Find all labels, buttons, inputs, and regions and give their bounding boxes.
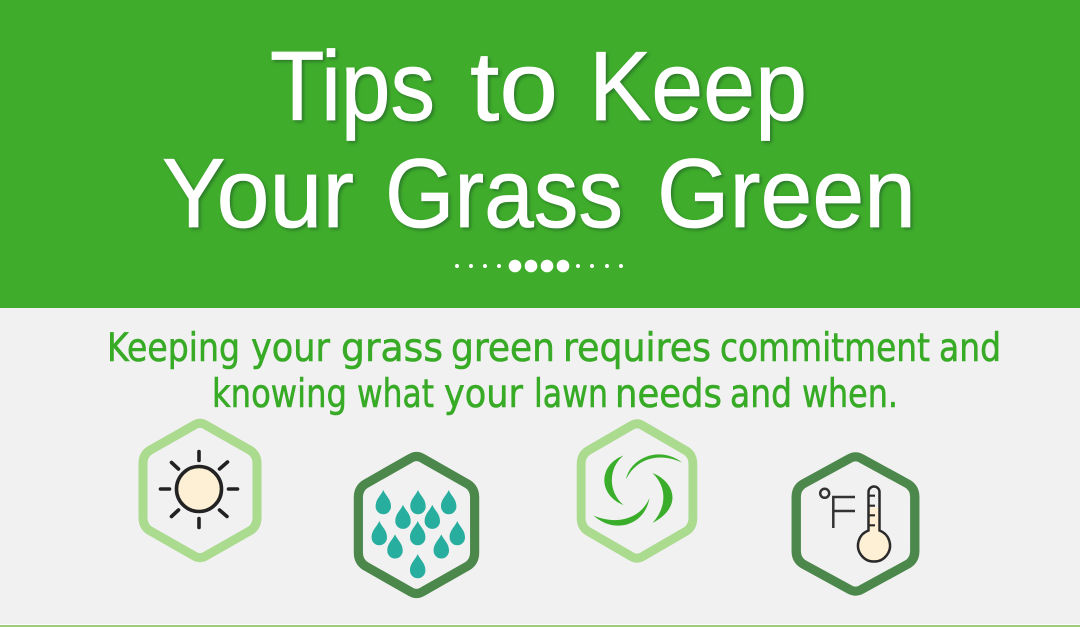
intro text: your: [444, 372, 524, 417]
intro text: your: [251, 326, 331, 371]
intro text: what: [357, 372, 434, 417]
title: Green: [657, 138, 916, 248]
intro text: green: [451, 326, 555, 371]
icon: thermometer in hexagon: [796, 457, 915, 591]
intro text: and: [730, 372, 792, 417]
bottom rule: [0, 624, 1080, 627]
icon: wind swirl in hexagon: [581, 424, 693, 558]
intro text: knowing: [212, 372, 347, 417]
header band: [0, 0, 1080, 308]
icon: sun in hexagon: [143, 423, 257, 558]
intro text: when.: [802, 372, 898, 417]
title: Grass: [385, 138, 623, 248]
intro text: grass: [341, 326, 443, 371]
title: Tips: [270, 31, 435, 141]
intro text: lawn: [534, 372, 608, 417]
intro text: Keeping: [107, 326, 240, 371]
title: to: [470, 31, 558, 141]
intro text: and: [939, 326, 1001, 371]
title: [162, 31, 916, 248]
title: Your: [162, 138, 354, 248]
title: Keep: [589, 31, 807, 141]
intro text: needs: [615, 372, 722, 417]
intro text: commitment: [720, 326, 930, 371]
dotted divider: [455, 260, 623, 272]
intro text: [107, 326, 1001, 417]
intro text: requires: [563, 326, 711, 371]
icon: water drops in hexagon: [358, 457, 475, 593]
